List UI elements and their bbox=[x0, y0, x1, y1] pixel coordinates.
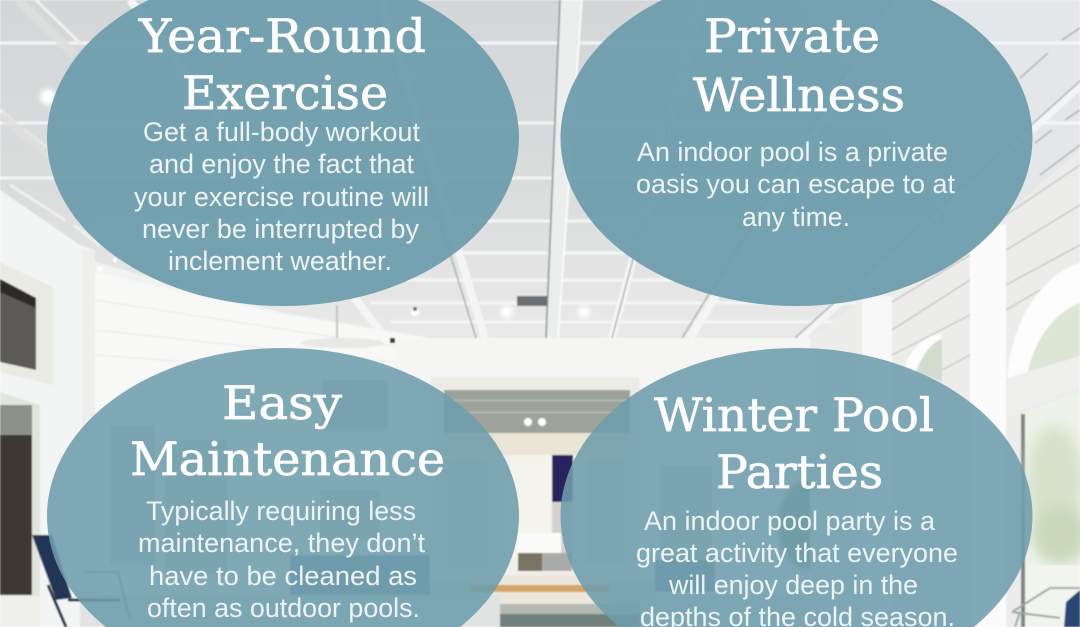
panel: Year-Round Exercise bbox=[47, 0, 519, 306]
text: Easy Maintenance description: maintenance, they don’t bbox=[138, 528, 426, 558]
left chair bbox=[32, 535, 130, 627]
text: Year-Round Exercise description: Get a full-body workout bbox=[143, 117, 421, 147]
heading: Easy Maintenance bbox=[130, 376, 445, 486]
text: Easy Maintenance description: Typically requiring less bbox=[146, 496, 416, 526]
text: Winter Pool Parties description: will enjoy deep in the bbox=[668, 570, 918, 600]
heading: Year-Round Exercise: Exercise bbox=[182, 66, 388, 120]
heading: Year-Round Exercise bbox=[138, 9, 426, 120]
upper left beams bbox=[0, 0, 100, 245]
left windows and door bbox=[0, 262, 53, 627]
central ceiling beam bbox=[546, 0, 582, 338]
text: Winter Pool Parties description bbox=[636, 506, 958, 627]
heading: Private Wellness: Private bbox=[704, 9, 880, 63]
right chair bbox=[1012, 588, 1080, 627]
text: Easy Maintenance description: have to be cleaned as bbox=[149, 561, 417, 591]
panel: Private Wellness bbox=[560, 0, 1032, 306]
text: Easy Maintenance description bbox=[138, 496, 426, 623]
heading: Winter Pool Parties: Winter Pool bbox=[654, 388, 934, 442]
heading: Easy Maintenance: Maintenance bbox=[130, 432, 445, 486]
heading: Year-Round Exercise: Year-Round bbox=[138, 9, 426, 63]
text: Year-Round Exercise description bbox=[134, 117, 429, 276]
text: Winter Pool Parties description: An indoor pool party is a bbox=[644, 506, 935, 536]
text: Winter Pool Parties description: great activity that everyone bbox=[636, 538, 958, 568]
back wall and doorway bbox=[395, 338, 825, 627]
panel: Easy Maintenance bbox=[47, 348, 519, 627]
ceiling panels bbox=[0, 0, 1080, 338]
heading: Private Wellness bbox=[693, 9, 905, 122]
text: Private Wellness description: oasis you can escape to at bbox=[636, 169, 956, 199]
text: Private Wellness description: any time. bbox=[742, 202, 850, 232]
text: Year-Round Exercise description: inclement weather. bbox=[168, 246, 392, 276]
floor and rug bbox=[395, 575, 655, 627]
panel: Winter Pool Parties bbox=[560, 348, 1032, 627]
text: Private Wellness description: An indoor pool is a private bbox=[637, 137, 948, 167]
text: Year-Round Exercise description: your exercise routine will bbox=[134, 182, 429, 212]
upper right seams bbox=[372, 0, 1080, 338]
ceiling vent and lights bbox=[40, 89, 590, 318]
camera and ceiling fan left bbox=[300, 305, 397, 348]
heading: Winter Pool Parties: Parties bbox=[716, 445, 883, 499]
large side window bbox=[1021, 392, 1080, 627]
left wall bbox=[0, 190, 430, 627]
right wall bbox=[810, 150, 1080, 627]
text: Private Wellness description bbox=[636, 137, 956, 232]
heading: Private Wellness: Wellness bbox=[693, 68, 905, 122]
text: Year-Round Exercise description: and enjoy the fact that bbox=[149, 149, 415, 179]
small arched window bbox=[903, 334, 942, 382]
heading: Winter Pool Parties bbox=[654, 388, 934, 499]
text: Year-Round Exercise description: never be interrupted by bbox=[142, 214, 420, 244]
large arched window bbox=[1007, 263, 1080, 414]
right room furnishings behind panel bbox=[640, 430, 1030, 627]
heading: Easy Maintenance: Easy bbox=[222, 376, 342, 430]
left room furnishings behind panel bbox=[80, 380, 500, 627]
text: Easy Maintenance description: often as outdoor pools. bbox=[147, 593, 420, 623]
